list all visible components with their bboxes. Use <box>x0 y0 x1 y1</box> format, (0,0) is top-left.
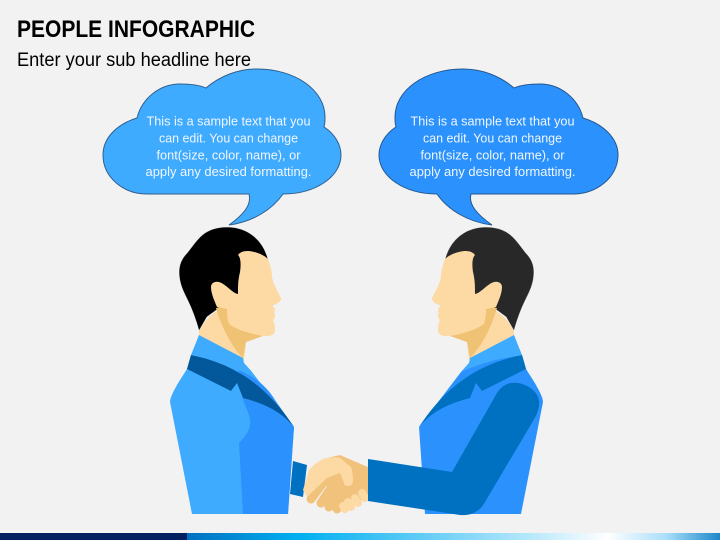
finger tips <box>343 493 365 509</box>
right neck <box>451 305 514 360</box>
speech bubble: right: can edit. You can change <box>423 130 562 146</box>
speech bubble: right: apply any desired formatting. <box>410 164 576 179</box>
speech bubble: left: can edit. You can change <box>159 130 298 146</box>
left neck shadow <box>216 306 263 358</box>
back hand <box>323 455 368 500</box>
left hair <box>179 227 268 331</box>
front hand <box>303 457 353 497</box>
right collar <box>461 335 522 372</box>
title: PEOPLE INFOGRAPHIC <box>17 16 255 43</box>
lower fingers <box>311 480 346 509</box>
right raised arm <box>368 383 539 515</box>
person: right <box>419 227 543 514</box>
speech bubble: left: apply any desired formatting. <box>146 164 312 179</box>
speech bubble: right: This is a sample text that you <box>410 114 574 128</box>
handshake <box>303 455 368 509</box>
right neck shadow <box>450 306 497 358</box>
left collar <box>191 335 252 372</box>
person: left <box>170 227 307 514</box>
right face <box>432 251 502 336</box>
speech bubble: right: font(size, color, name), or <box>420 148 565 162</box>
subtitle: Enter your sub headline here <box>17 50 251 71</box>
left neck <box>199 305 262 360</box>
left face <box>211 251 281 336</box>
right suit body <box>419 355 543 514</box>
speech bubble: left: font(size, color, name), or <box>156 148 301 162</box>
footer bar <box>0 533 720 540</box>
speech bubble: right <box>379 69 618 225</box>
left suit body <box>170 355 294 514</box>
speech bubble: left <box>103 69 341 225</box>
left sleeve <box>290 461 307 497</box>
speech bubble: left: This is a sample text that you <box>146 114 310 128</box>
right hair <box>445 227 534 331</box>
